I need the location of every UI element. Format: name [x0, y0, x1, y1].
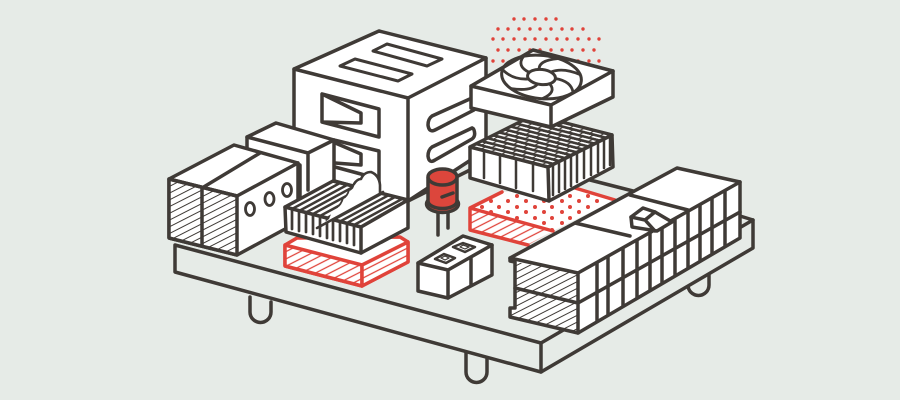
red dotted plate — [470, 180, 633, 245]
fan ring and blades — [499, 51, 584, 103]
left face windows — [322, 94, 379, 165]
cloud-shaped cutaway — [317, 172, 380, 228]
circuit board — [175, 216, 753, 372]
latch — [631, 208, 672, 231]
small back box — [247, 123, 379, 200]
terminal dividers — [595, 191, 727, 321]
fan unit — [471, 50, 613, 127]
heatsink front fins — [292, 209, 354, 245]
large cube — [294, 31, 486, 201]
left face fins — [484, 151, 533, 191]
legs under board — [250, 264, 709, 383]
small white block — [418, 236, 492, 298]
capacitor — [426, 169, 458, 235]
heatsink top stripes — [292, 183, 402, 225]
left heatsink — [285, 172, 408, 253]
left twin hatched boxes — [169, 145, 298, 255]
roof slots — [340, 44, 442, 81]
dot pattern behind fan — [491, 17, 601, 63]
right face fins — [553, 136, 610, 195]
large connector block — [510, 168, 740, 333]
illustration: isometric circuit board — [167, 17, 755, 384]
plate dots — [480, 194, 599, 232]
red hatched plate under left heatsink — [285, 237, 408, 286]
socket holes — [435, 243, 475, 263]
large heatsink — [470, 115, 613, 201]
icon: three holes — [246, 202, 254, 216]
right face slots — [428, 98, 474, 131]
